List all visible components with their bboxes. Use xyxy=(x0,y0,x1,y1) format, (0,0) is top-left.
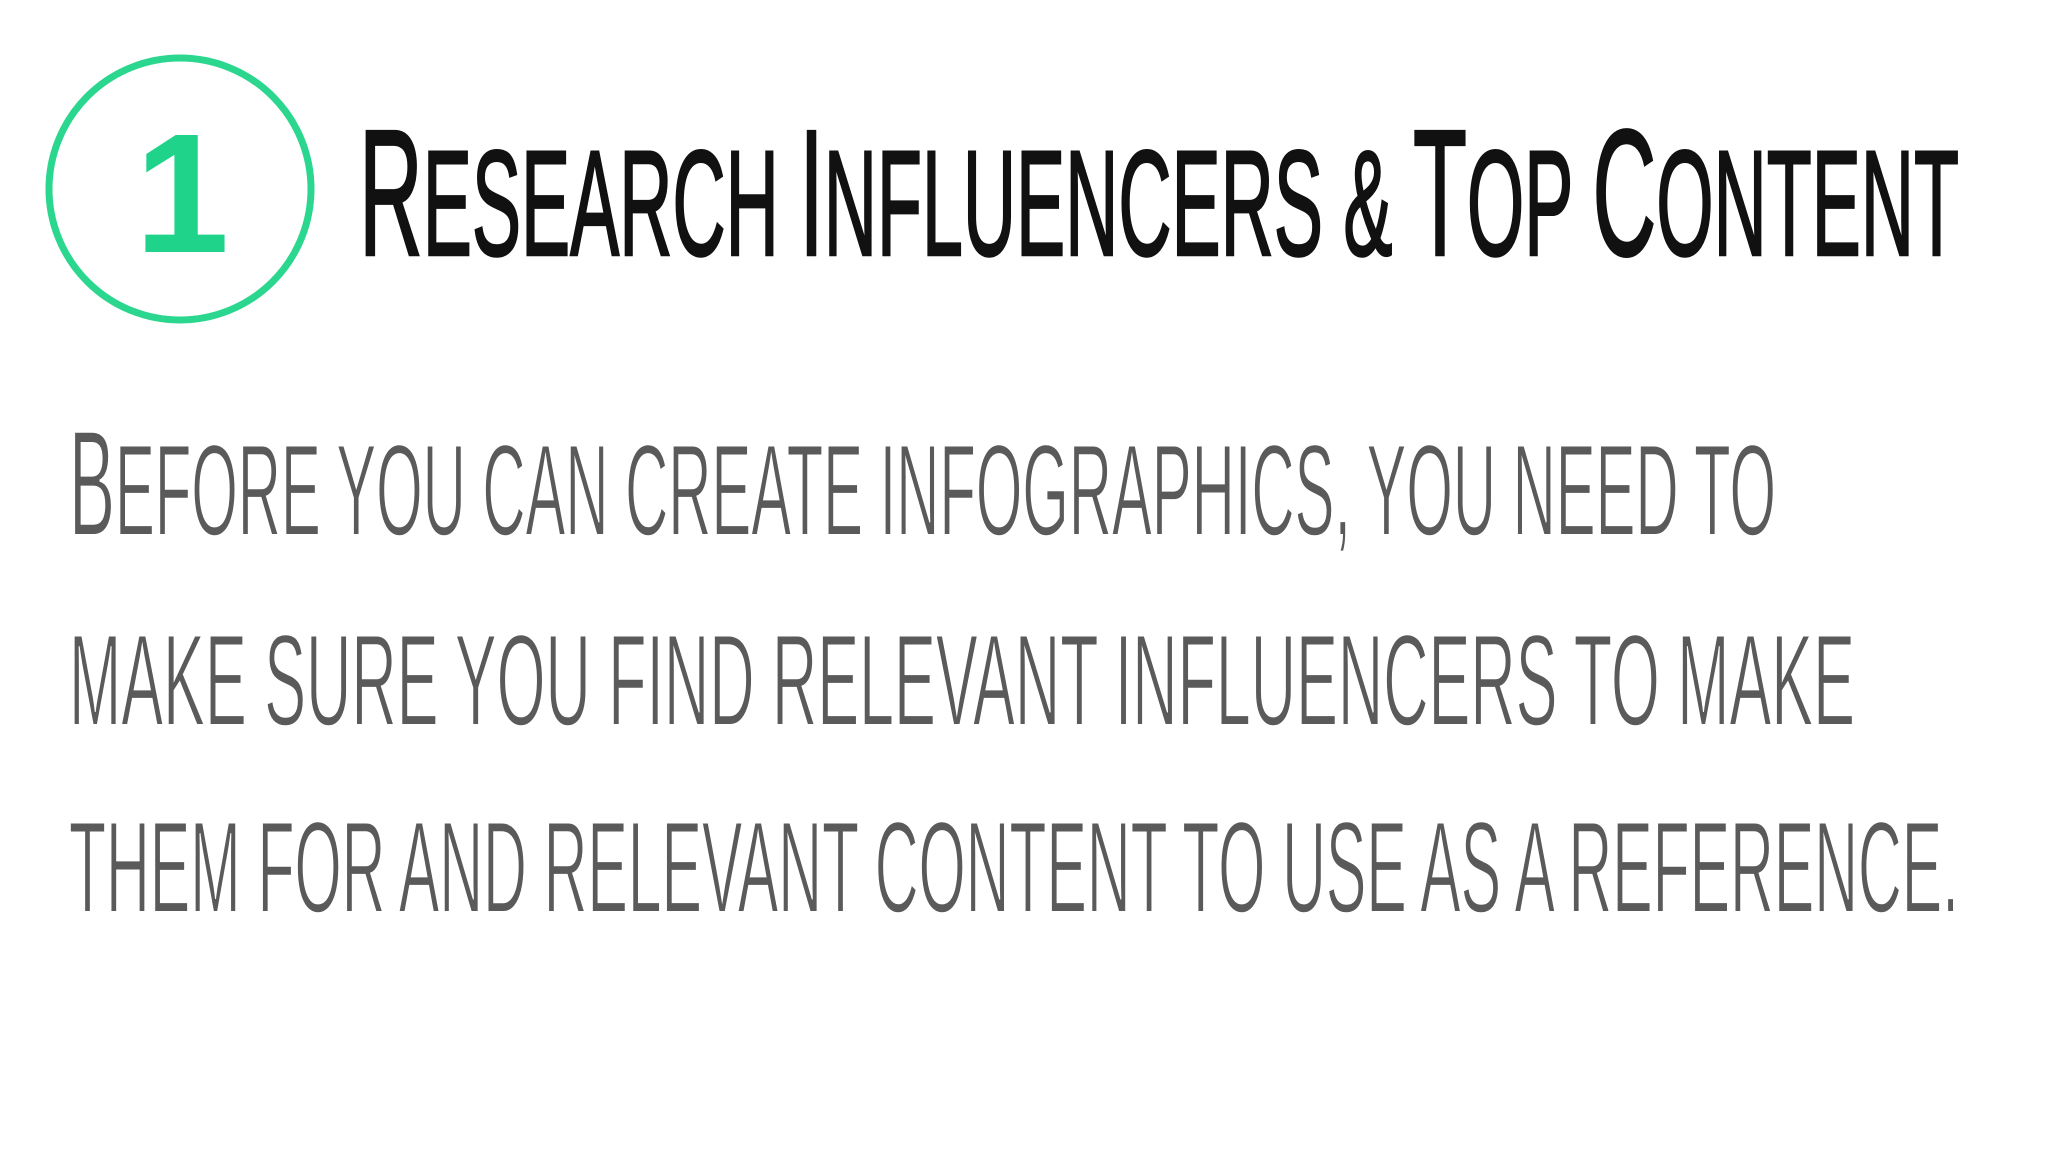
icon: numbered circle 1: 1 xyxy=(135,99,229,289)
body text xyxy=(69,399,1959,940)
icon: numbered circle 1 xyxy=(49,58,311,320)
